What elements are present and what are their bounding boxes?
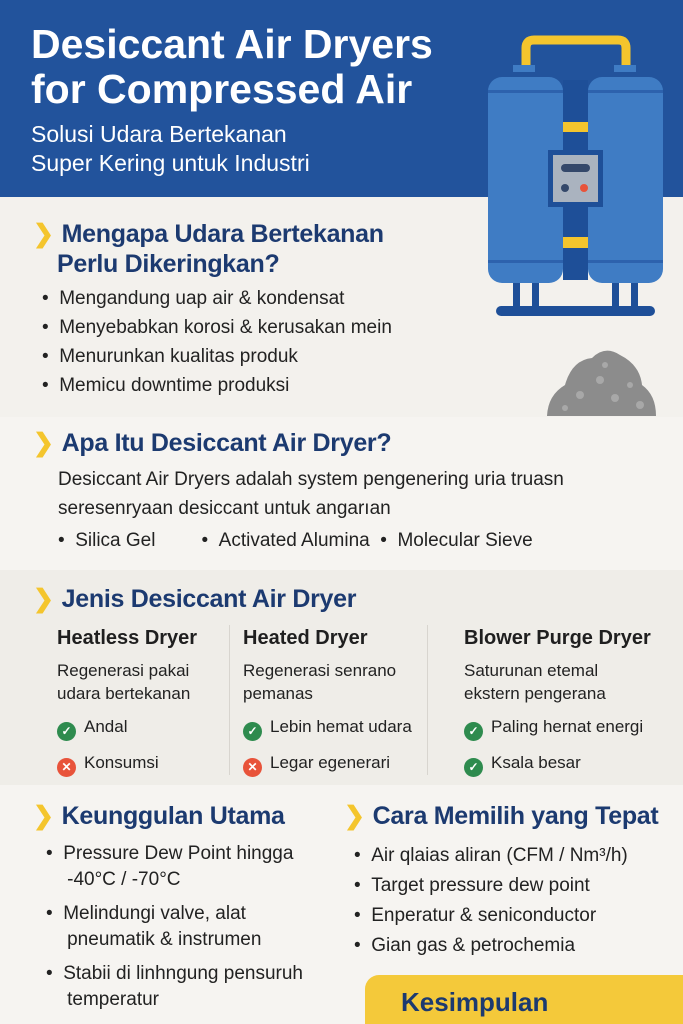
list: advantages	[46, 843, 303, 1024]
heading: mengapa: ❯ Mengapa Udara Bertekanan	[33, 220, 384, 248]
column: blower purge: ✓	[468, 760, 479, 774]
icon: desiccant dryer	[488, 36, 663, 416]
heading: mengapa: Perlu Dikeringkan?	[57, 250, 279, 278]
column: heatless: Regenerasi pakai	[57, 661, 189, 680]
column: blower purge	[464, 627, 651, 777]
column: blower purge: ✓	[468, 724, 479, 738]
column: blower purge: Ksala besar	[491, 753, 581, 772]
subtitle: Solusi Udara Bertekanan	[31, 121, 287, 147]
column: heated: Regenerasi senrano	[243, 661, 396, 680]
column: heatless: ✓	[61, 724, 72, 738]
callout: kesimpulan	[365, 975, 683, 1024]
column: blower purge: Blower Purge Dryer	[464, 627, 651, 649]
title	[31, 21, 433, 112]
heading: keunggulan: ❯ Keunggulan Utama	[33, 802, 285, 830]
text: definition: seresenryaan desiccant untuk angarıan	[58, 498, 391, 519]
subtitle	[31, 121, 310, 176]
heading: cara memilih: ❯ Cara Memilih yang Tepat	[344, 802, 658, 830]
list: selection: • Enperatur & seniconductor	[354, 905, 596, 926]
column: heated: Heated Dryer	[243, 627, 368, 649]
column: heatless	[57, 627, 197, 777]
column: heatless: udara bertekanan	[57, 684, 190, 703]
list: selection	[354, 845, 628, 956]
list: desiccant types: • Silica Gel • Activated Alumina • Molecular Sieve	[58, 530, 533, 551]
heading: jenis: ❯ Jenis Desiccant Air Dryer	[33, 585, 356, 613]
column: heatless: Andal	[84, 717, 127, 736]
title: for Compressed Air	[31, 66, 412, 112]
column: heatless: ✕	[61, 760, 72, 774]
callout: kesimpulan: Kesimpulan	[401, 987, 548, 1017]
text: definition	[58, 469, 564, 519]
column: blower purge: Saturunan etemal	[464, 661, 598, 680]
list: advantages: • Pressure Dew Point hingga	[46, 843, 293, 864]
column: heated: ✓	[247, 724, 258, 738]
column: heatless: Konsumsi	[84, 753, 159, 772]
text: definition: Desiccant Air Dryers adalah system pengenering uria truasn	[58, 469, 564, 490]
subtitle: Super Kering untuk Industri	[31, 150, 310, 176]
column: heated: ✕	[247, 760, 258, 774]
heading: apa itu: ❯ Apa Itu Desiccant Air Dryer?	[33, 429, 391, 457]
column: heated: pemanas	[243, 684, 313, 703]
column: heated: Lebin hemat udara	[270, 717, 412, 736]
list: advantages: pneumatik & instrumen • Stabii di linhngung pensuruh	[46, 929, 303, 984]
heading: mengapa	[33, 220, 384, 278]
header band	[0, 0, 683, 197]
section backgrounds	[0, 417, 683, 570]
list: selection: • Target pressure dew point	[354, 875, 590, 896]
list: selection: • Gian gas & petrochemia	[354, 935, 575, 956]
list: reasons: • Mengandung uap air & kondensat	[42, 288, 344, 309]
column: blower purge: Paling hernat energi	[491, 717, 643, 736]
list: reasons: • Menyebabkan korosi & kerusakan mein	[42, 317, 392, 338]
title: Desiccant Air Dryers	[31, 21, 433, 67]
list: reasons	[42, 288, 392, 396]
list: reasons: • Memicu downtime produksi	[42, 375, 289, 396]
list: reasons: • Menurunkan kualitas produk	[42, 346, 298, 367]
list: selection: • Air qlaias aliran (CFM / Nm³/h)	[354, 845, 628, 866]
column: heatless: Heatless Dryer	[57, 627, 197, 649]
column: heated: Legar egenerari	[270, 753, 390, 772]
list: advantages: -40°C / -70°C • Melindungi valve, alat	[46, 869, 246, 924]
column: blower purge: ekstern pengerana	[464, 684, 606, 703]
column: heated	[243, 627, 412, 777]
